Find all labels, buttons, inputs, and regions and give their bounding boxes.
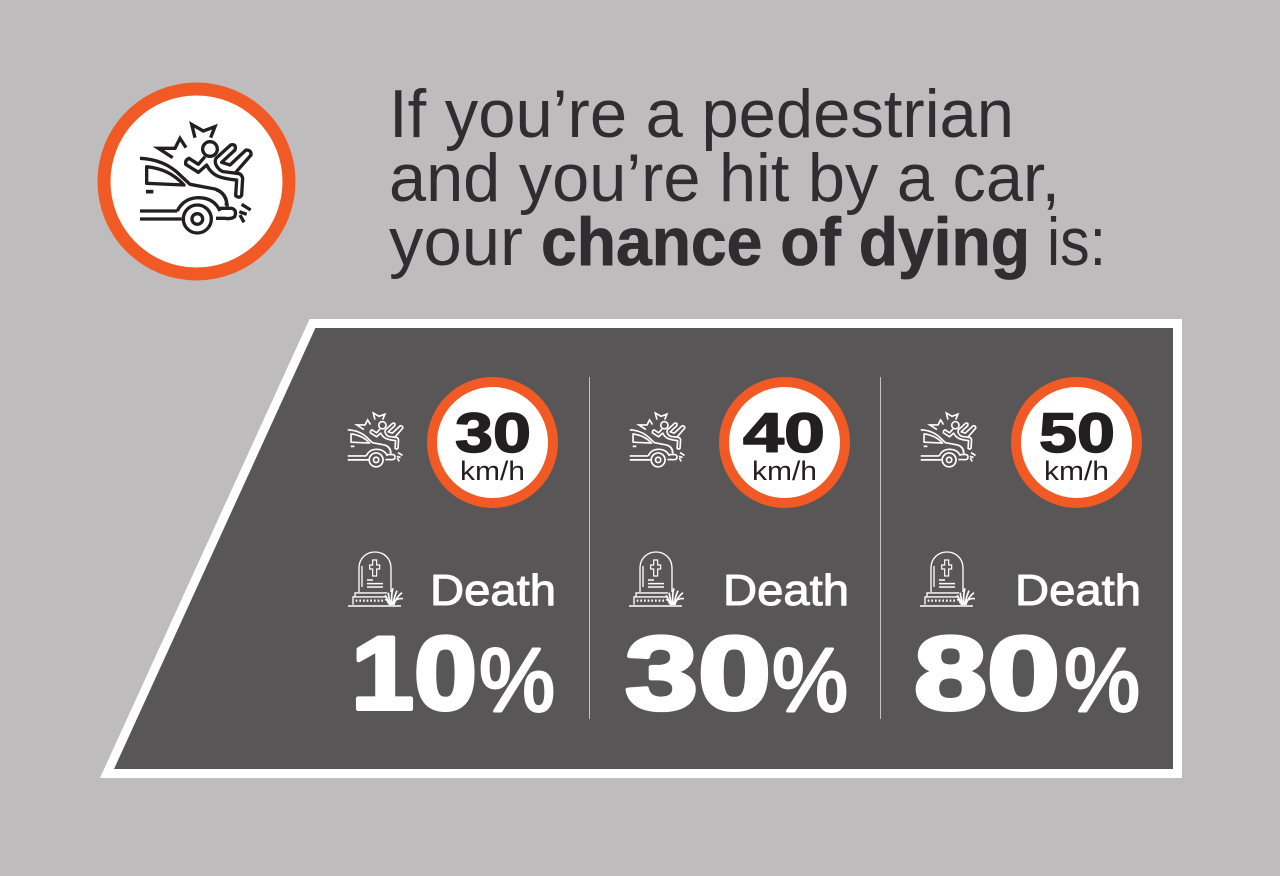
icon: car hitting pedestrian — [140, 124, 251, 233]
icon: crash — [630, 413, 685, 467]
column: 40 km/h — [625, 382, 849, 732]
icon: gravestone — [348, 552, 403, 606]
main crash icon badge — [104, 89, 289, 274]
value: 10%: % — [479, 631, 555, 731]
value: 30%: 30 — [625, 616, 771, 732]
speed sign 40 — [724, 382, 845, 503]
speed sign 50 — [1016, 382, 1137, 503]
value: 30%: % — [772, 631, 848, 731]
speed sign 40: km/h — [752, 456, 817, 486]
title: chance of dying — [541, 204, 1030, 280]
label: Death: Death — [430, 566, 556, 615]
value: 30% — [625, 616, 848, 732]
title — [389, 76, 1106, 280]
title: If you’re a pedestrian — [389, 76, 1014, 152]
icon: gravestone — [920, 552, 975, 606]
column: 30 km/h — [348, 382, 556, 732]
title: is: — [1047, 204, 1106, 280]
value: 10% — [351, 616, 555, 732]
speed sign 30: 30 — [455, 401, 531, 464]
icon: crash — [348, 413, 403, 467]
value: 80% — [914, 616, 1140, 732]
speed sign 30 — [432, 382, 553, 503]
title: and you’re hit by a car, — [389, 140, 1060, 216]
label: Death: Death — [723, 566, 849, 615]
speed sign 40: 40 — [743, 401, 825, 464]
icon: crash — [921, 413, 976, 467]
speed sign 50: km/h — [1044, 456, 1109, 486]
value: 10%: 10 — [351, 616, 477, 732]
icon: gravestone — [629, 552, 684, 606]
value: 80%: % — [1064, 631, 1140, 731]
speed sign 30: km/h — [460, 456, 525, 486]
label: Death: Death — [1015, 566, 1141, 615]
title: your — [389, 204, 523, 280]
value: 80%: 80 — [914, 616, 1060, 732]
speed sign 50: 50 — [1039, 401, 1115, 464]
panel: death rates by speed — [107, 324, 1178, 774]
column: 50 km/h — [914, 382, 1141, 732]
